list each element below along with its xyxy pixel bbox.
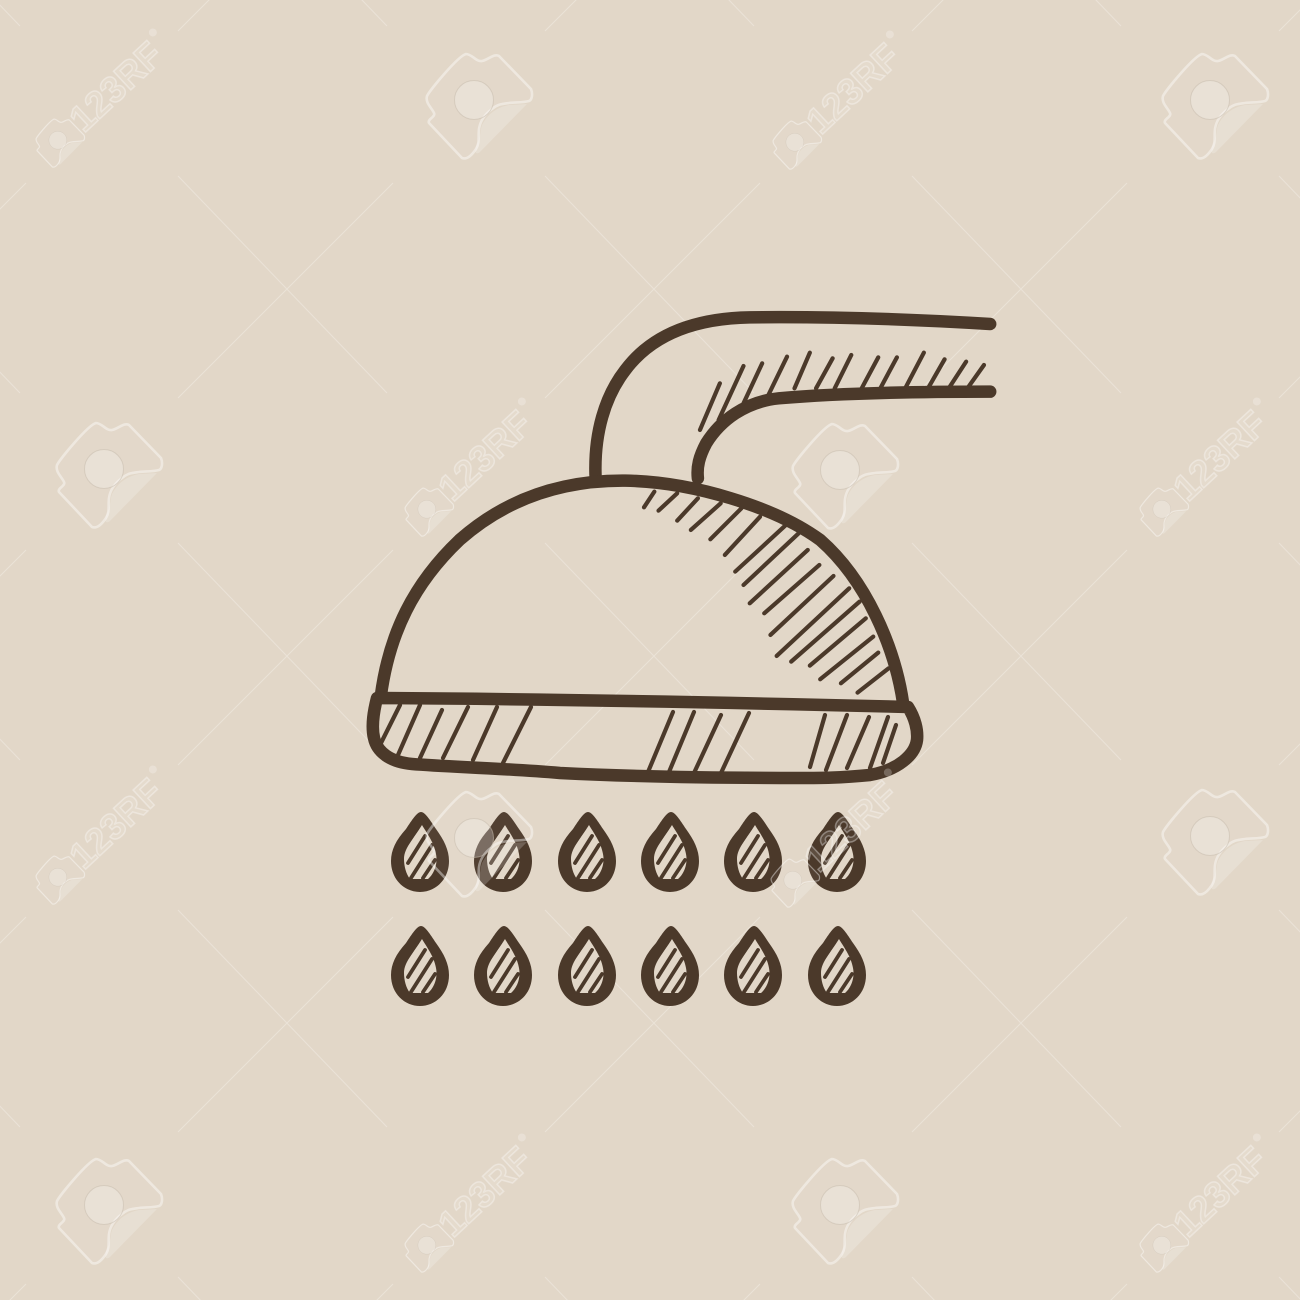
rim band <box>373 698 917 778</box>
watermark: 123RF logos: 123RF <box>430 403 540 509</box>
watermark: 123RF logos: 123RF <box>61 771 171 877</box>
dome hatching <box>644 492 889 693</box>
icon: shower head <box>373 317 990 778</box>
pipe hatching <box>700 353 984 430</box>
watermark: 123RF logos: 123RF <box>430 1139 540 1245</box>
water drops: upper row <box>391 812 866 892</box>
watermark: 123RF logos: 123RF <box>1165 403 1275 509</box>
watermark: 123RF logos: 123RF <box>1165 1139 1275 1245</box>
dome <box>381 481 903 703</box>
watermark: 123RF logos: 123RF <box>798 36 908 142</box>
rim hatching <box>380 705 896 773</box>
water pipe <box>595 317 990 478</box>
watermark: 123RF logos: 123RF <box>796 774 906 880</box>
water drops: lower row <box>391 926 866 1006</box>
watermark: 123RF logos: 123RF <box>61 34 171 140</box>
